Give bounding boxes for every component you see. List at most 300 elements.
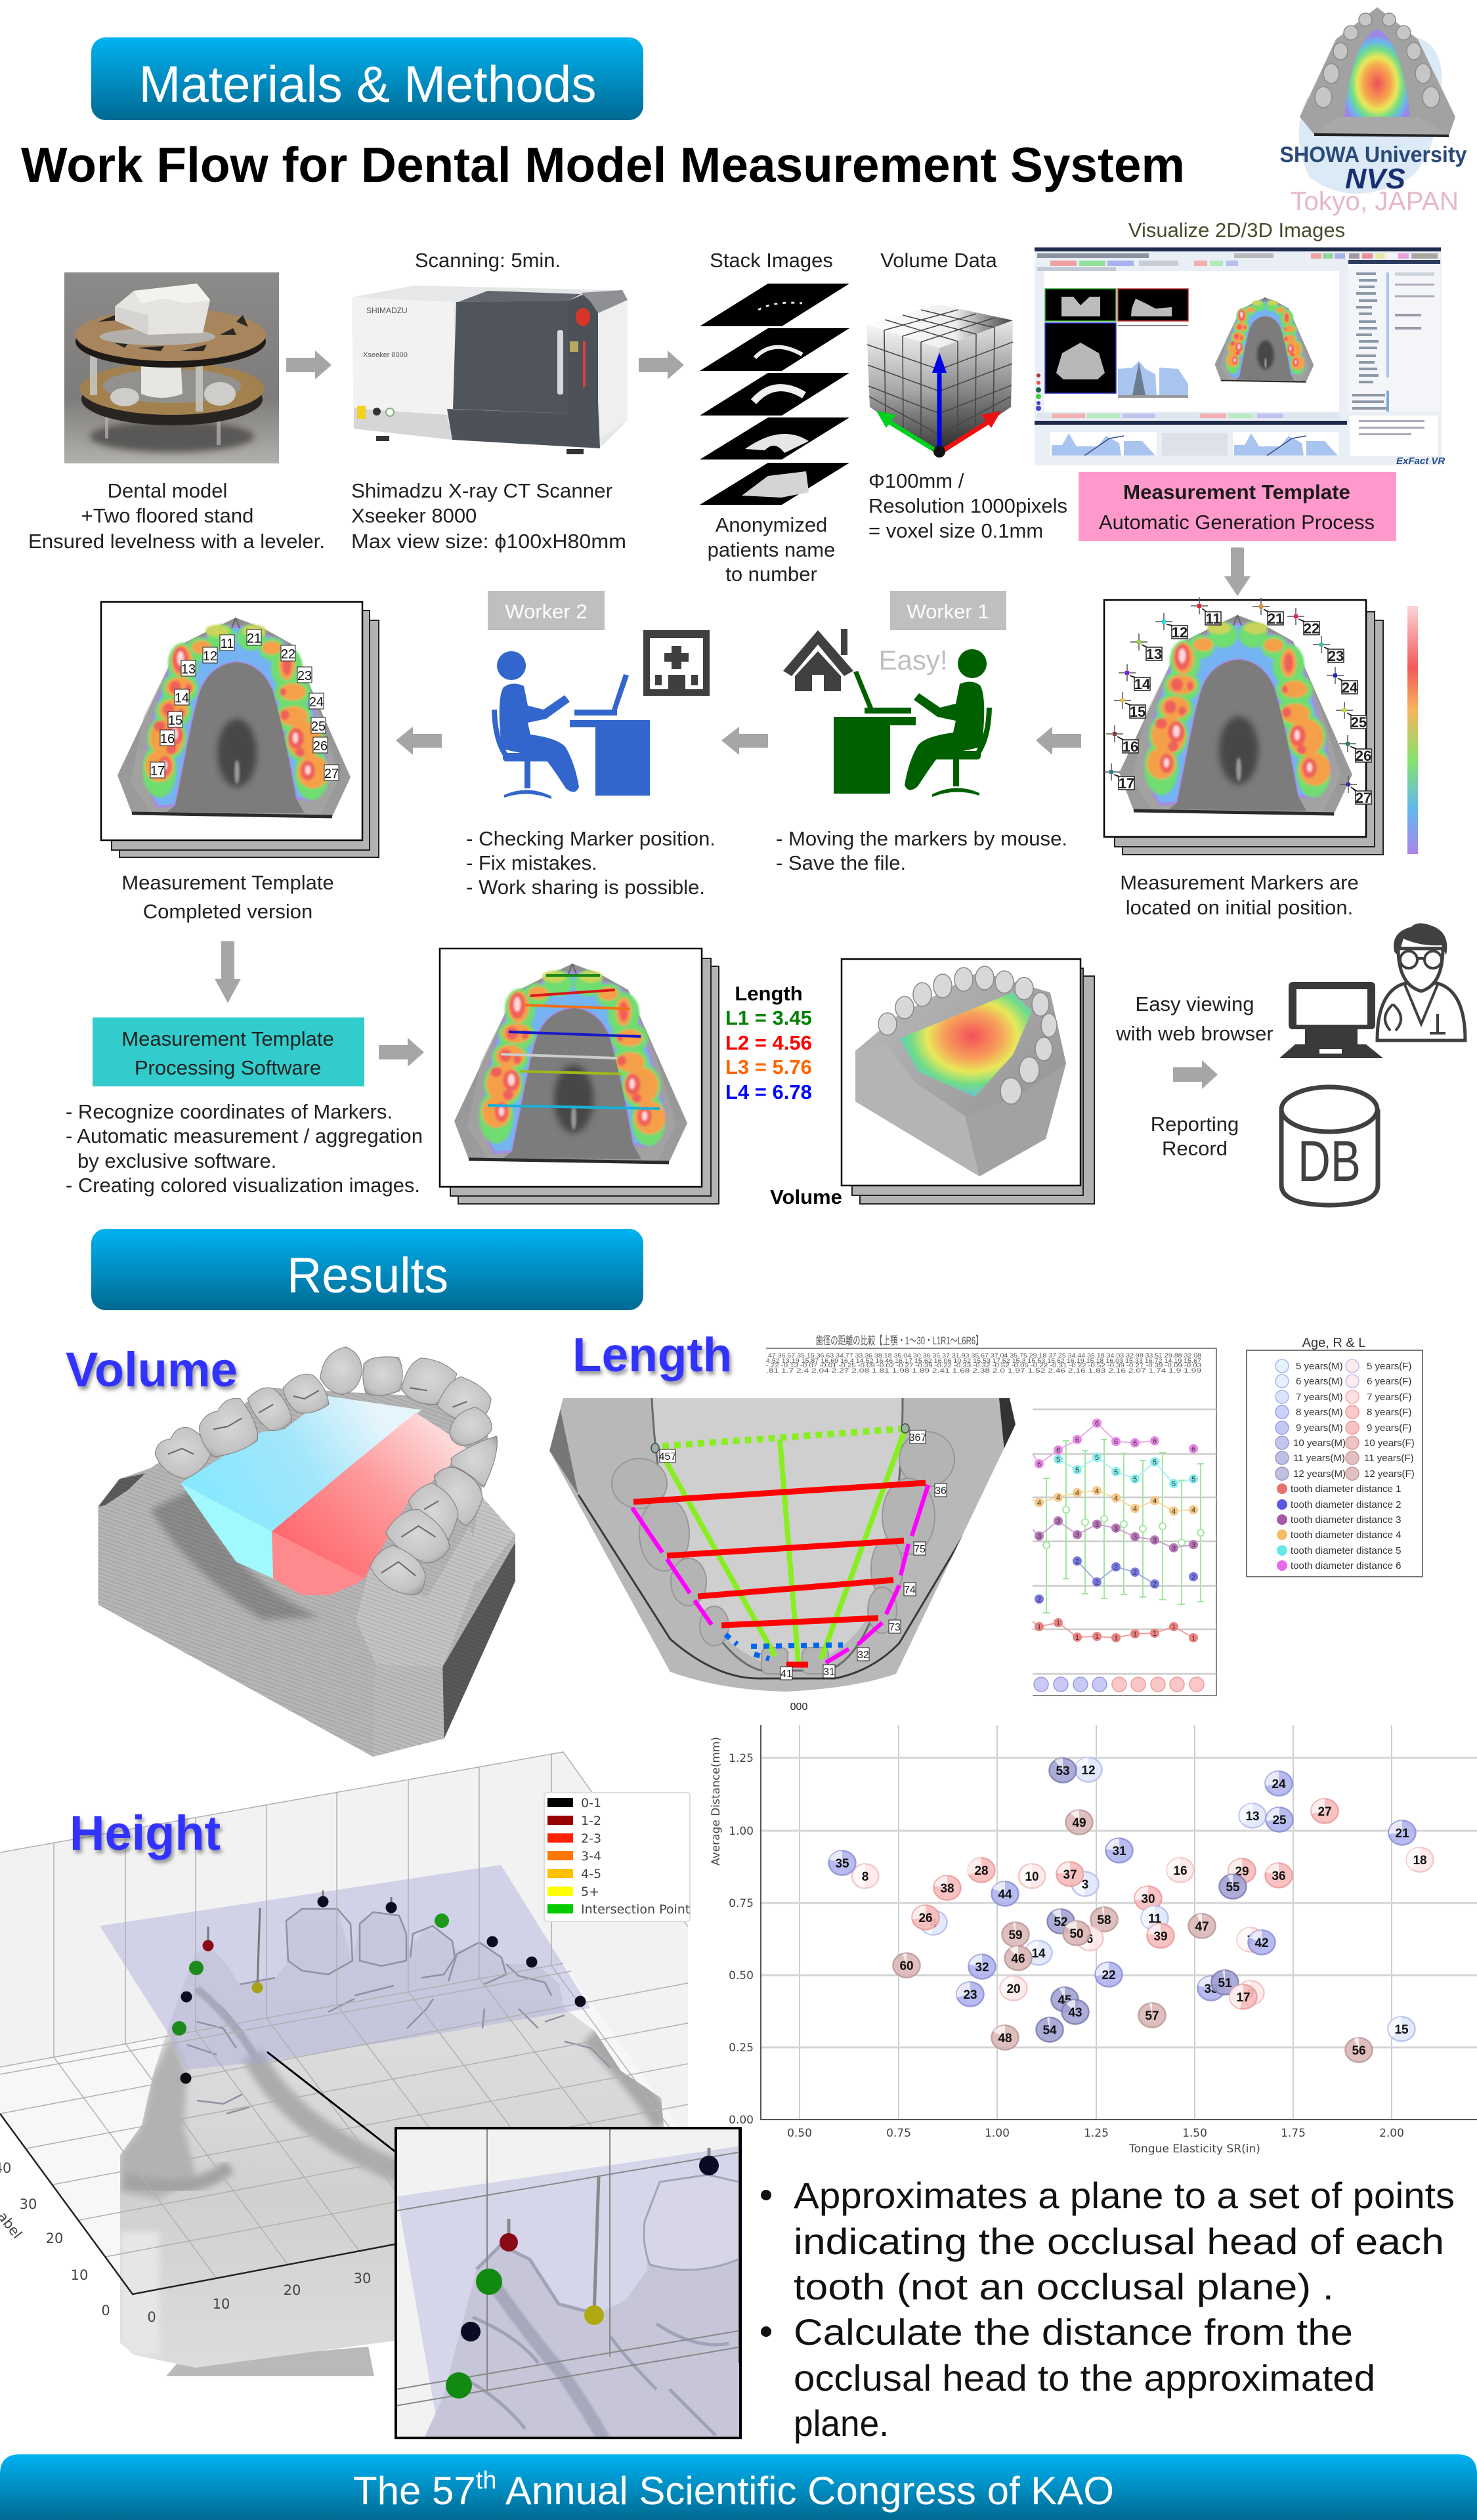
panel: tooth diameter line chart: 2: [1153, 1581, 1157, 1589]
panel: tooth diameter line chart: 3: [1095, 1521, 1099, 1529]
panel: completed template stack: 26: [313, 739, 328, 754]
logo: Showa University: Tokyo, JAPAN: [1291, 187, 1459, 216]
chart: scatter plot elasticity vs distance: Tongue Elasticity SR(in): [1128, 2143, 1260, 2156]
chart: scatter plot elasticity vs distance: 42: [1254, 1936, 1269, 1950]
panel: tooth diameter line chart: 2: [1095, 1579, 1099, 1587]
panel: completed template stack: 27: [324, 767, 339, 781]
caption: dental model: +Two floored stand: [81, 504, 253, 527]
panel: tooth diameter line chart: 5: [1056, 1456, 1060, 1464]
chart: scatter plot elasticity vs distance: 54: [1042, 2024, 1057, 2038]
chart: scatter plot elasticity vs distance: 36: [1272, 1869, 1286, 1883]
chart: scatter plot elasticity vs distance: 48: [998, 2032, 1012, 2045]
software screenshot: ExFact VR: [1396, 456, 1445, 467]
caption: worker 1 tasks: - Moving the markers by mouse.: [776, 827, 1067, 850]
panel: tooth diameter line chart: 3: [1114, 1525, 1118, 1533]
chart: scatter plot elasticity vs distance: 1.00: [729, 1825, 754, 1838]
footer banner: The 57: [353, 2469, 476, 2513]
legend: age and tooth diameter: tooth diameter distance 3: [1291, 1514, 1401, 1526]
chart: scatter plot elasticity vs distance: 23: [963, 1988, 977, 2002]
chart: 3D height plot with fitted plane: 10: [213, 2296, 230, 2312]
chart: scatter plot elasticity vs distance: 13: [1245, 1810, 1260, 1824]
label: visualize: Visualize 2D/3D Images: [1128, 219, 1345, 242]
caption: CT scanner: Max view size: ϕ100xH80mm: [351, 530, 626, 553]
caption: resolution: = voxel size 0.1mm: [868, 519, 1043, 542]
CT scanner: [352, 286, 628, 454]
caption: initial markers: Measurement Markers are: [1120, 871, 1359, 894]
icon: database: DB: [1298, 1128, 1361, 1193]
panel: completed template stack: 25: [311, 719, 326, 734]
panel: tooth diameter line chart: 5: [1095, 1454, 1099, 1462]
volume cube with axes: [867, 305, 1013, 458]
caption: completed template: [121, 871, 334, 923]
figure: length CT image with measurement lines: 457: [659, 1451, 676, 1463]
chart: scatter plot elasticity vs distance: 33: [1204, 1982, 1218, 1996]
arrow: to stack images: [639, 351, 684, 379]
chart: scatter plot elasticity vs distance: 49: [1072, 1816, 1086, 1830]
chart: scatter plot elasticity vs distance: 24: [1272, 1778, 1286, 1791]
stack images: [700, 284, 849, 505]
figure: length CT image with measurement lines: [549, 1398, 1016, 1713]
heading button: Results: Results: [287, 1248, 448, 1304]
text: length values: L2 = 4.56: [725, 1031, 812, 1054]
legend: age and tooth diameter: 6 years(F): [1367, 1376, 1411, 1387]
label: reporting record: Record: [1162, 1137, 1228, 1160]
chart: scatter plot elasticity vs distance: 16: [1173, 1864, 1188, 1878]
panel: tooth diameter line chart: 歯径の距離の比較【上顎・1～30・L1R1～L6R6】: [815, 1335, 983, 1347]
panel: completed template stack: 11: [221, 637, 234, 651]
panel: tooth diameter line chart: .81 1.7 2.4 2.04 2.27 2.08 1.81 1.98 1.89 2.41 1.68 2.38 2.0 1.97 1.52 2.46 2.16 1.83 2.16 2.07 1.74 1.9 1.99: [766, 1367, 1201, 1374]
panel: initial marker stack: 26: [1356, 748, 1371, 764]
panel: tooth diameter line chart: 6: [1095, 1420, 1099, 1428]
label: worker 1: [890, 591, 1006, 630]
legend: age and tooth diameter: 8 years(F): [1367, 1407, 1411, 1418]
panel: tooth diameter line chart: 1: [1172, 1623, 1176, 1631]
text block: method bullets: [761, 2175, 1455, 2444]
panel: tooth diameter line chart: 5: [1114, 1468, 1118, 1476]
panel: completed template stack: 21: [247, 631, 261, 646]
panel: tooth diameter line chart: 4: [1172, 1508, 1176, 1516]
figure: length CT image with measurement lines: 32: [857, 1650, 869, 1661]
arrow: left from markers: [1036, 727, 1081, 755]
chart: scatter plot elasticity vs distance: 1.50: [1182, 2127, 1207, 2140]
label: volume data: Volume Data: [880, 249, 998, 272]
heading: volume: Volume: [66, 1342, 238, 1397]
chart: scatter plot elasticity vs distance: 15: [1394, 2023, 1409, 2037]
chart: scatter plot elasticity vs distance: 30: [1141, 1892, 1155, 1906]
label: web browser: Easy viewing: [1136, 993, 1254, 1015]
legend: age and tooth diameter: 5 years(M): [1296, 1361, 1343, 1372]
label: worker 2: [488, 591, 605, 630]
panel: tooth diameter line chart: 1: [1191, 1634, 1195, 1642]
list: software functions: - Creating colored visualization images.: [66, 1174, 420, 1197]
caption: resolution: Φ100mm /: [868, 469, 964, 492]
list: software functions: - Automatic measurement / aggregation: [66, 1124, 423, 1147]
box: processing software: Processing Software: [135, 1056, 321, 1079]
panel: tooth diameter line chart: 4.52 13.19 15.87 16.69 16.4 14.52 16.46 16.17 15.62 16.06 10.52 15.53 17.52 15.3 15.53 15.62 16.19 15.18 16.03 15.33 16.72 14.19 15.67: [766, 1357, 1201, 1364]
panel: tooth diameter line chart: 1: [1075, 1634, 1079, 1642]
box: processing software: Measurement Template: [121, 1027, 334, 1050]
panel: initial marker stack: [1103, 597, 1383, 855]
chart: scatter plot elasticity vs distance: 44: [998, 1888, 1012, 1902]
legend: age and tooth diameter: tooth diameter distance 4: [1291, 1529, 1401, 1541]
label: web browser: [1115, 993, 1274, 1045]
chart: 3D height plot with fitted plane: [0, 1752, 688, 2376]
panel: tooth diameter line chart: 3: [1172, 1545, 1176, 1552]
panel: tooth diameter line chart: 6: [1191, 1445, 1195, 1453]
box: measurement template generation: [1079, 472, 1396, 541]
panel: initial marker stack: 22: [1304, 620, 1319, 637]
chart: scatter plot elasticity vs distance: 7: [1247, 1934, 1254, 1948]
chart: 3D height plot with fitted plane: 10: [71, 2267, 88, 2283]
figure: length CT image with measurement lines: 31: [823, 1667, 835, 1678]
panel: tooth diameter line chart: 1: [1056, 1619, 1060, 1627]
caption: dental model: [28, 479, 325, 553]
chart: scatter plot elasticity vs distance: 38: [940, 1882, 954, 1896]
panel: completed template stack: 16: [160, 732, 175, 746]
chart: scatter plot elasticity vs distance: Average Distance(mm): [710, 1737, 723, 1866]
legend: height ranges: Intersection Point: [581, 1902, 690, 1917]
panel: tooth diameter line chart: 3: [1191, 1541, 1195, 1549]
chart: scatter plot elasticity vs distance: 12: [1081, 1764, 1096, 1778]
legend: height ranges: 2-3: [581, 1831, 601, 1846]
software screenshot: [1035, 247, 1445, 467]
arrow: to scanner: [286, 351, 332, 379]
chart: scatter plot elasticity vs distance: 0.75: [729, 1897, 754, 1910]
legend: height ranges: 0-1: [581, 1796, 601, 1810]
panel: tooth diameter line chart: 3: [1153, 1537, 1157, 1545]
title: Work Flow for Dental Model Measurement System: [21, 137, 1185, 192]
caption: dental model: Ensured levelness with a leveler.: [28, 530, 325, 553]
chart: scatter plot elasticity vs distance: 0.50: [787, 2127, 812, 2140]
legend: age and tooth diameter: [1247, 1336, 1423, 1577]
panel: tooth diameter line chart: 2: [1114, 1564, 1118, 1571]
caption: CT scanner: [351, 479, 626, 553]
icon: house: [783, 629, 853, 691]
text: length values: L3 = 5.76: [725, 1056, 812, 1078]
panel: tooth diameter line chart: 4: [1114, 1495, 1118, 1503]
arrow: to record: [1173, 1060, 1218, 1089]
figure: length CT image with measurement lines: 000: [790, 1701, 807, 1713]
logo: Showa University: NVS: [1345, 163, 1405, 195]
icon: doctor: [1377, 923, 1465, 1040]
panel: tooth diameter line chart: 3: [1056, 1518, 1060, 1526]
figure: volume 3D model: [98, 1347, 515, 1757]
arrow: left to completed template: [396, 727, 442, 755]
panel: tooth diameter line chart: [766, 1335, 1216, 1696]
panel: tooth diameter line chart: 3: [1075, 1531, 1079, 1539]
legend: age and tooth diameter: 7 years(M): [1296, 1392, 1343, 1403]
arrow: to length image: [379, 1038, 424, 1067]
caption: initial markers: [1120, 871, 1359, 919]
chart: scatter plot elasticity vs distance: 6: [1086, 1933, 1093, 1946]
legend: age and tooth diameter: tooth diameter distance 1: [1291, 1484, 1401, 1495]
caption: CT scanner: Shimadzu X-ray CT Scanner: [351, 479, 612, 502]
panel: initial marker stack: 14: [1134, 676, 1151, 693]
chart: scatter plot elasticity vs distance: 1.75: [1281, 2127, 1306, 2140]
photo: dental model on stand: [64, 272, 279, 463]
legend: age and tooth diameter: 12 years(F): [1364, 1468, 1415, 1480]
arrow: down to software: [215, 941, 241, 1003]
figure: length CT image with measurement lines: 73: [889, 1622, 901, 1633]
panel: tooth diameter line chart: 6: [1037, 1461, 1041, 1468]
panel: initial marker stack: 15: [1130, 704, 1145, 720]
panel: completed template stack: 13: [181, 662, 196, 677]
chart: scatter plot elasticity vs distance: 46: [1011, 1952, 1025, 1966]
chart: scatter plot elasticity vs distance: 57: [1145, 2009, 1159, 2023]
panel: tooth diameter line chart: 6: [1114, 1438, 1118, 1446]
chart: scatter plot elasticity vs distance: 9: [1247, 1987, 1254, 2001]
legend: height ranges: 3-4: [581, 1849, 601, 1864]
legend: age and tooth diameter: Age, R & L: [1302, 1336, 1365, 1350]
list: software functions: [66, 1100, 423, 1197]
figure: length CT image with measurement lines: 74: [904, 1585, 916, 1596]
chart: scatter plot elasticity vs distance: 21: [1395, 1827, 1409, 1841]
text: length values: Length: [735, 982, 803, 1005]
figure: length CT image with measurement lines: 36: [935, 1485, 947, 1497]
text block: method bullets: Approximates a plane to a set of points: [794, 2175, 1455, 2216]
figure: length CT image with measurement lines: 367: [909, 1432, 926, 1443]
chart: 3D height plot with fitted plane: 20: [46, 2231, 63, 2246]
arrow: down to markers: [1224, 547, 1251, 596]
panel: tooth diameter line chart: 1: [1037, 1623, 1041, 1631]
chart: scatter plot elasticity vs distance: 14: [1031, 1947, 1046, 1961]
chart: scatter plot elasticity vs distance: 3: [1082, 1878, 1088, 1892]
panel: initial marker stack: 17: [1119, 775, 1134, 792]
caption: resolution: [868, 469, 1067, 542]
chart: scatter plot elasticity vs distance: 1.25: [1084, 2127, 1109, 2140]
caption: anonymized: patients name: [708, 538, 835, 561]
panel: tooth diameter line chart: 4: [1133, 1505, 1137, 1513]
panel: tooth diameter line chart: 5: [1133, 1476, 1137, 1484]
text block: method bullets: plane.: [794, 2403, 889, 2444]
CT scanner: Xseeker 8000: [363, 351, 408, 359]
chart: scatter plot elasticity vs distance: 37: [1063, 1868, 1077, 1882]
panel: tooth diameter line chart: 5: [1075, 1466, 1079, 1474]
legend: age and tooth diameter: 11 years(F): [1364, 1453, 1414, 1464]
panel: tooth diameter line chart: 6: [1153, 1438, 1157, 1445]
panel: tooth diameter line chart: 3: [1133, 1533, 1137, 1541]
label: reporting record: [1151, 1113, 1239, 1160]
callout line: [267, 2052, 395, 2151]
legend: age and tooth diameter: 10 years(F): [1364, 1438, 1415, 1449]
panel: initial marker stack: 11: [1205, 610, 1221, 627]
chart: scatter plot elasticity vs distance: 32: [975, 1961, 989, 1975]
caption: dental model: Dental model: [108, 479, 227, 502]
chart: scatter plot elasticity vs distance: 18: [1413, 1854, 1427, 1868]
footer banner: Annual Scientific Congress of KAO: [496, 2469, 1114, 2513]
panel: tooth diameter line chart: 2: [1037, 1596, 1041, 1604]
panel: tooth diameter line chart: -.22 -0.13 -0.07 -0.01 -0.25 -0.09 -0.02 -0.27 -0.39 -0.22 -0.33 -0.32 -0.52 -0.05 -0.22 -0.31 -0.22 -0.52 -0.39 -0.27 -0.39 -0.09 -0.03: [766, 1362, 1201, 1369]
panel: completed template stack: 22: [281, 647, 295, 662]
CT scanner: SHIMADZU: [366, 306, 408, 315]
panel: completed template stack: 23: [297, 669, 312, 683]
caption: worker 2 tasks: - Work sharing is possible.: [466, 876, 705, 899]
legend: height ranges: 5+: [581, 1885, 599, 1899]
heading button: Results: [91, 1229, 643, 1310]
panel: tooth diameter line chart: 5: [1191, 1476, 1195, 1484]
chart: scatter plot elasticity vs distance: 0.50: [729, 1969, 754, 1982]
legend: age and tooth diameter: 11 years(M): [1293, 1453, 1345, 1464]
legend: height ranges: 4-5: [581, 1867, 601, 1881]
chart: scatter plot elasticity vs distance: 27: [1317, 1805, 1332, 1819]
label: worker 1: Worker 1: [907, 600, 989, 623]
icon: hospital: [643, 630, 710, 696]
icon: worker 1 at desk: [834, 649, 989, 797]
caption: anonymized: [708, 513, 835, 586]
caption: worker 2 tasks: [466, 827, 716, 899]
panel: completed template stack: [101, 602, 379, 857]
panel: initial marker stack: 23: [1328, 648, 1344, 664]
icon: worker 2 at desk: [494, 651, 650, 799]
chart: scatter plot elasticity vs distance: 0.75: [886, 2127, 911, 2140]
panel: tooth diameter line chart: 2: [1133, 1569, 1137, 1577]
heading: length: Length: [572, 1329, 732, 1382]
caption: CT scanner: Xseeker 8000: [351, 504, 477, 527]
chart: scatter plot elasticity vs distance: 25: [1272, 1814, 1287, 1827]
label: stack images: Stack Images: [710, 249, 833, 272]
chart: scatter plot elasticity vs distance: 58: [1097, 1913, 1111, 1927]
panel: tooth diameter line chart: .47 36.57 35.15 36.63 34.77 33.36 38.18 35.04 30.36 35.37 31.93 35.67 37.04 35.75 29.18 37.25 34.44 35.18 34.03 32.98 33.51 29.88 32.08: [766, 1352, 1201, 1359]
panel: tooth diameter line chart: 4: [1191, 1506, 1195, 1514]
legend: age and tooth diameter: 9 years(F): [1367, 1422, 1411, 1434]
caption: worker 1 tasks: - Save the file.: [776, 851, 906, 874]
chart: scatter plot elasticity vs distance: 51: [1218, 1976, 1232, 1990]
panel: tooth diameter line chart: 3: [1037, 1533, 1041, 1541]
panel: tooth diameter line chart: 2: [1191, 1573, 1195, 1581]
caption: worker 1 tasks: [776, 827, 1067, 874]
legend: age and tooth diameter: 6 years(M): [1296, 1376, 1343, 1387]
chart: scatter plot elasticity vs distance: 31: [1112, 1845, 1126, 1858]
panel: completed template stack: 24: [309, 695, 324, 710]
chart: 3D height plot with fitted plane: 0: [101, 2303, 110, 2318]
panel: tooth diameter line chart: 1: [1153, 1630, 1157, 1638]
chart: scatter plot elasticity vs distance: 28: [974, 1864, 989, 1878]
chart: scatter plot elasticity vs distance: 0.00: [729, 2114, 754, 2127]
panel: tooth diameter line chart: 6: [1075, 1436, 1079, 1444]
panel: tooth diameter line chart: 5: [1153, 1459, 1157, 1466]
caption: resolution: Resolution 1000pixels: [868, 494, 1067, 517]
icon: laptop: [1279, 982, 1383, 1058]
list: software functions: - Recognize coordinates of Markers.: [66, 1100, 393, 1123]
chart: scatter plot elasticity vs distance: 29: [1235, 1865, 1249, 1879]
panel: tooth diameter line chart: 4: [1153, 1497, 1157, 1505]
chart: scatter plot elasticity vs distance: 20: [1006, 1982, 1021, 1996]
list: software functions: by exclusive software.: [77, 1149, 276, 1172]
chart: 3D height plot with fitted plane: 20: [284, 2282, 301, 2298]
panel: tooth diameter line chart: 5: [1172, 1480, 1176, 1488]
panel: initial marker stack: 27: [1356, 790, 1371, 806]
box: measurement template generation: Measurement Template: [1123, 481, 1350, 503]
caption: initial markers: located on initial position.: [1126, 896, 1353, 919]
panel: initial marker stack: 24: [1342, 679, 1358, 696]
text: length values: L1 = 3.45: [725, 1006, 812, 1029]
label: web browser: with web browser: [1115, 1022, 1274, 1045]
legend: age and tooth diameter: 12 years(M): [1293, 1468, 1346, 1480]
legend: age and tooth diameter: tooth diameter distance 6: [1291, 1560, 1401, 1571]
chart: scatter plot elasticity vs distance: 60: [899, 1959, 914, 1973]
chart: scatter plot elasticity vs distance: 35: [835, 1857, 849, 1871]
text: easy: Easy!: [878, 645, 948, 675]
figure: length CT image with measurement lines: 41: [781, 1669, 792, 1680]
chart: scatter plot elasticity vs distance: 1.25: [729, 1752, 754, 1765]
caption: worker 2 tasks: - Checking Marker position.: [466, 827, 716, 850]
panel: initial marker stack: 16: [1123, 738, 1138, 755]
legend: age and tooth diameter: 8 years(M): [1296, 1407, 1343, 1418]
legend: age and tooth diameter: 7 years(F): [1367, 1392, 1411, 1403]
legend: age and tooth diameter: tooth diameter distance 5: [1291, 1545, 1401, 1556]
panel: tooth diameter line chart: 2: [1075, 1558, 1079, 1566]
text block: method bullets: occlusal head to the approximated: [794, 2357, 1375, 2399]
panel: tooth diameter line chart: 6: [1133, 1440, 1137, 1447]
chart: 3D height plot with fitted plane: 30: [20, 2196, 37, 2212]
chart: scatter plot elasticity vs distance: 26: [918, 1911, 933, 1925]
caption: worker 2 tasks: - Fix mistakes.: [466, 851, 597, 874]
caption: completed template: Measurement Template: [121, 871, 334, 894]
panel: volume heatmap stack: [842, 959, 1094, 1204]
label: reporting record: Reporting: [1151, 1113, 1239, 1136]
text: length values: L4 = 6.78: [725, 1080, 812, 1103]
panel: tooth diameter line chart: 1: [1133, 1631, 1137, 1638]
color scale bar: [1407, 606, 1418, 854]
chart: scatter plot elasticity vs distance: 4: [930, 1917, 937, 1931]
panel: initial marker stack: 21: [1268, 610, 1283, 627]
panel: completed template stack: 14: [175, 691, 189, 706]
figure: length CT image with measurement lines: 75: [914, 1544, 926, 1555]
legend: age and tooth diameter: 10 years(M): [1293, 1438, 1346, 1449]
panel: tooth diameter line chart: 4: [1095, 1487, 1099, 1495]
chart: scatter plot elasticity vs distance: 45: [1058, 1994, 1072, 2007]
chart: 3D height plot with fitted plane: 30: [354, 2271, 371, 2286]
panel: tooth diameter line chart: 4: [1075, 1489, 1079, 1497]
panel: initial marker stack: 25: [1351, 714, 1367, 731]
chart: scatter plot elasticity vs distance: 43: [1068, 2006, 1082, 2020]
chart: scatter plot elasticity vs distance: 8: [862, 1870, 868, 1884]
panel: completed template stack: 15: [168, 714, 182, 728]
text: length values: [725, 982, 812, 1103]
panel: tooth diameter line chart: 4: [1037, 1499, 1041, 1507]
chart: scatter plot elasticity vs distance: 52: [1054, 1915, 1068, 1929]
inset: zoomed plane detail: [396, 2128, 742, 2439]
box: processing software: [93, 1017, 364, 1086]
heading button: Materials & Methods: Materials & Methods: [139, 55, 596, 113]
legend: age and tooth diameter: 9 years(M): [1296, 1422, 1343, 1434]
legend: age and tooth diameter: tooth diameter distance 2: [1291, 1499, 1401, 1510]
legend: height ranges: 1-2: [581, 1814, 601, 1828]
chart: scatter plot elasticity vs distance: 50: [1069, 1927, 1084, 1941]
panel: length measurement stack: [440, 949, 719, 1204]
label: worker 2: Worker 2: [505, 600, 588, 623]
panel: initial marker stack: 12: [1172, 624, 1188, 641]
logo: Showa University: SHOWA University: [1280, 142, 1467, 167]
footer banner: [0, 2454, 1477, 2520]
chart: scatter plot elasticity vs distance: 2.00: [1379, 2127, 1404, 2140]
panel: tooth diameter line chart: 1: [1095, 1633, 1099, 1641]
box: measurement template generation: Automatic Generation Process: [1099, 511, 1375, 534]
chart: scatter plot elasticity vs distance: [710, 1725, 1477, 2156]
panel: completed template stack: 17: [150, 764, 165, 779]
caption: anonymized: Anonymized: [716, 513, 827, 536]
chart: scatter plot elasticity vs distance: 1.00: [985, 2127, 1010, 2140]
chart: scatter plot elasticity vs distance: 53: [1056, 1764, 1070, 1778]
chart: 3D height plot with fitted plane: 0: [147, 2309, 156, 2325]
text block: method bullets: tooth (not an occlusal plane) .: [794, 2266, 1334, 2307]
label: volume: Volume: [770, 1185, 842, 1208]
chart: scatter plot elasticity vs distance: 17: [1236, 1991, 1251, 2005]
icon: database: [1281, 1087, 1378, 1205]
chart: scatter plot elasticity vs distance: 47: [1195, 1920, 1209, 1934]
chart: scatter plot elasticity vs distance: 39: [1153, 1930, 1168, 1944]
panel: initial marker stack: 13: [1146, 646, 1162, 662]
